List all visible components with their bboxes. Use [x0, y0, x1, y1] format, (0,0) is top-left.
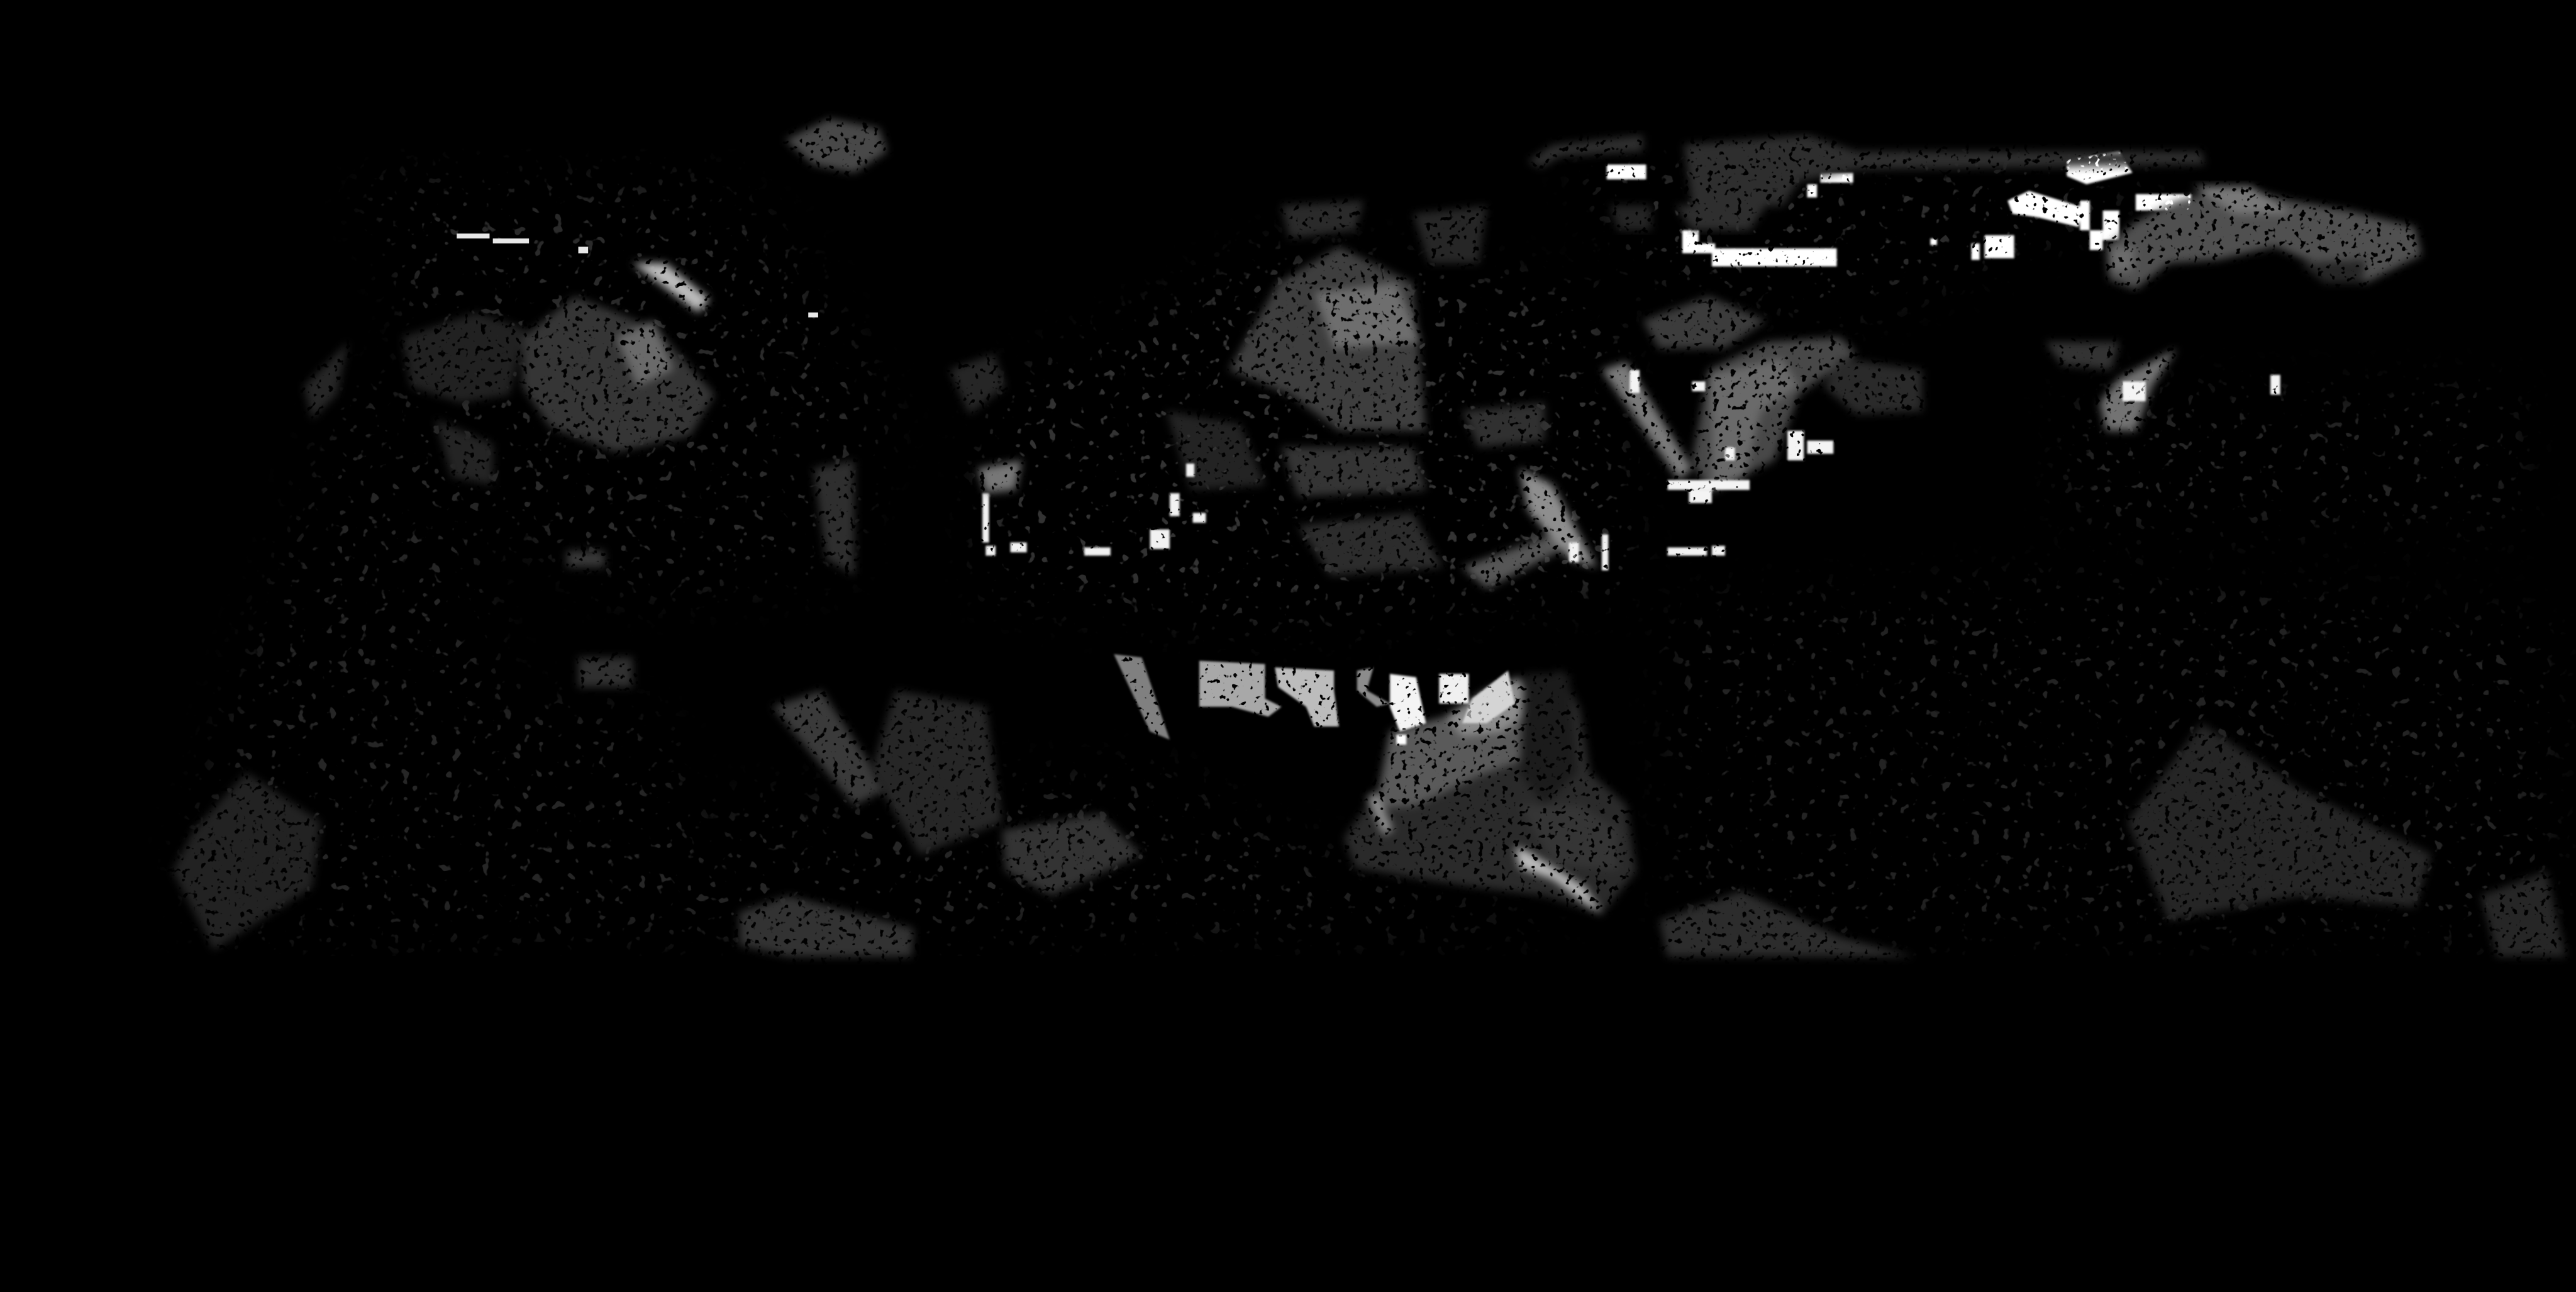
region: southern Africa-like landmass [1344, 671, 1636, 914]
region: mid-latitude bright specks [982, 464, 1725, 571]
region: South America and southern ocean masses [172, 691, 2566, 957]
region: Arctic white specks [457, 233, 818, 318]
layer: sparse speckle field [189, 165, 2546, 940]
region: south Atlantic bright patches [1114, 654, 1514, 745]
region: central Asia white clusters [1629, 370, 2280, 503]
region: Europe-like gray mass [1167, 201, 1597, 589]
region: eastern Asia gray landmass [2106, 186, 2421, 289]
region: North America streak and body [304, 118, 1006, 485]
region: northern Asia dark strip [1528, 135, 2205, 230]
region: northern Asia bright band [1607, 152, 2192, 267]
region: Atlantic isle patch [567, 460, 1022, 805]
region: central Asia fan [1602, 296, 2177, 493]
